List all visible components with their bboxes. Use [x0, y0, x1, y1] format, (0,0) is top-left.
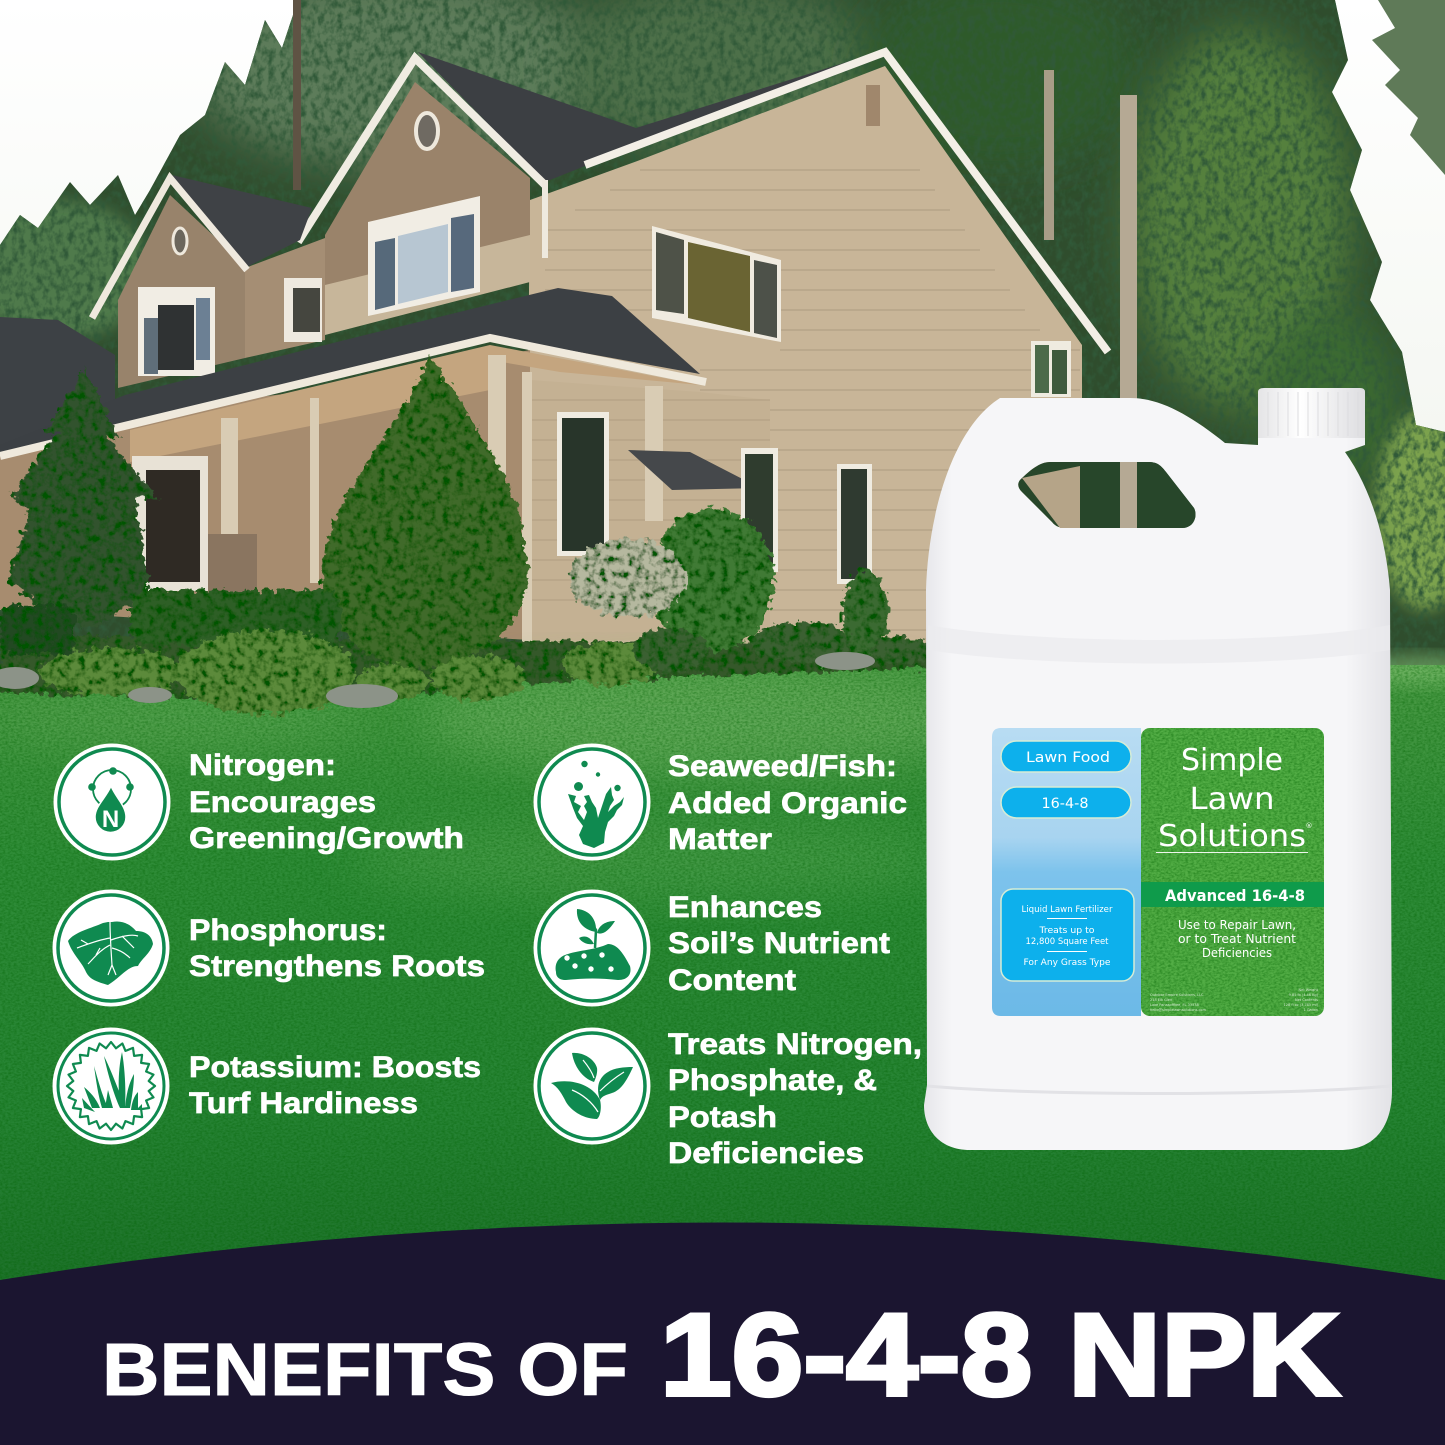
middle wall [245, 238, 325, 358]
dark low shrubs [632, 622, 930, 672]
left hedge [0, 605, 75, 655]
benefit: nitrogen [54, 744, 464, 860]
pill: lawn food [1001, 741, 1131, 772]
window: small mid [284, 278, 322, 342]
left gable fascia [92, 178, 247, 318]
brand name: ® [1306, 822, 1312, 830]
icon: soil with sprout [534, 890, 650, 1006]
pill: lawn food: Lawn Food [1026, 750, 1110, 766]
benefit: phosphorus [52, 890, 485, 1006]
feature box [1001, 889, 1134, 981]
text: deficiencies [668, 1028, 922, 1170]
text: nitrogen: Nitrogen: [189, 749, 336, 782]
text: nitrogen: Encourages [189, 786, 376, 819]
label green panel [1141, 728, 1324, 1016]
pill: 16-4-8 [1001, 787, 1131, 818]
label fine print [1150, 988, 1319, 1012]
flowering shrub [570, 538, 686, 618]
sky [0, 0, 1445, 700]
text: deficiencies: Phosphate, & [668, 1064, 877, 1097]
left round window [173, 228, 187, 254]
handle wall patch [1022, 466, 1080, 528]
porch columns [221, 355, 663, 642]
house [0, 50, 1108, 660]
label blue panel [992, 728, 1141, 1016]
garden bed [0, 635, 930, 704]
window: second gable [368, 196, 480, 316]
text: phosphorus: Strengthens Roots [189, 950, 485, 983]
tree trunks [293, 0, 1137, 530]
left gable wall [118, 195, 245, 388]
window: main upper [652, 226, 781, 342]
porch ceiling [130, 345, 700, 462]
siding lines [530, 170, 1080, 630]
banner heading: benefits of: BENEFITS OF [102, 1328, 628, 1411]
far right conifer [1372, 0, 1445, 175]
text: seaweed [668, 750, 907, 856]
second gable fascia [298, 58, 545, 242]
background trees [0, 0, 1445, 700]
banner heading: 16-4-8 NPK: 16-4-8 NPK [660, 1289, 1340, 1420]
brand name: Simple [1181, 743, 1283, 778]
base bumper shading [927, 1086, 1390, 1094]
label fine print: Outdoor Empire Solutions, LLC [1150, 993, 1204, 997]
icon: nitrogen drop: N [102, 806, 119, 833]
brand name: Solutions [1158, 819, 1306, 854]
text: seaweed: Added Organic [668, 787, 907, 820]
label fine print: 1 Gallon [1303, 1008, 1318, 1012]
text: potassium: Turf Hardiness [189, 1087, 418, 1120]
product jug [924, 388, 1392, 1150]
left lower roof [0, 317, 115, 445]
main gable fascia [585, 52, 1108, 352]
label fine print: hello@simplelawnsolutions.com [1150, 1008, 1207, 1012]
lower left wall [0, 350, 530, 640]
label fine print: 9.85 lb (4.46 Kg) [1289, 993, 1319, 997]
text: phosphorus: Phosphorus: [189, 914, 387, 947]
text: nitrogen: Greening/Growth [189, 822, 464, 855]
band text: Advanced 16-4-8 [1165, 886, 1305, 905]
stone pillar [200, 534, 257, 592]
feature box: For Any Grass Type [1024, 958, 1110, 968]
window: far low [837, 464, 872, 584]
window: right of awning [741, 448, 778, 572]
second gable shingles [325, 82, 530, 295]
window: far right [1031, 341, 1071, 397]
icon: grass burst [52, 1028, 170, 1144]
usage text: Use to Repair Lawn, [1178, 917, 1296, 932]
text: potassium [189, 1051, 481, 1120]
label fine print: 128 fl oz (3,785 ml) [1284, 1003, 1319, 1007]
label fine print: Lake Panasoffkee, FL 33538 [1150, 1003, 1199, 1007]
vent [866, 85, 880, 126]
handle trunk [1120, 462, 1137, 528]
text: potassium: Potassium: Boosts [189, 1051, 481, 1084]
brand name [1156, 743, 1312, 854]
text: soil: Enhances [668, 891, 822, 924]
text: deficiencies: Potash [668, 1101, 777, 1134]
white gutter [542, 180, 548, 258]
label fine print: Net Contents [1295, 998, 1318, 1002]
feature box: Treats up to [1038, 926, 1094, 936]
text: soil: Soil’s Nutrient [668, 927, 890, 960]
feature box: Liquid Lawn Fertilizer [1022, 905, 1113, 915]
label fine print: 218 Elk Glen [1150, 998, 1172, 1002]
window: porch left [132, 456, 208, 591]
shoulder shading [928, 625, 1390, 664]
text: nitrogen [189, 749, 464, 855]
round window [416, 113, 438, 149]
rocks [0, 652, 875, 708]
icon: soil with roots [52, 890, 170, 1006]
usage text: or to Treat Nutrient [1178, 931, 1296, 946]
benefit: seaweed [534, 744, 907, 860]
lower right wall [530, 380, 770, 640]
text: soil: Content [668, 964, 796, 997]
icon: leaves [534, 1028, 650, 1144]
porch roof [0, 288, 700, 452]
big cone shrub [322, 355, 528, 668]
text: seaweed: Seaweed/Fish: [668, 750, 897, 783]
green band [1141, 882, 1324, 907]
lawn highlight stripes [0, 654, 1445, 900]
benefit: soil [534, 890, 890, 1006]
shrub right of porch [650, 508, 774, 652]
text: seaweed: Matter [668, 823, 772, 856]
benefit: potassium [52, 1028, 481, 1144]
text: deficiencies: Treats Nitrogen, [668, 1028, 922, 1061]
main gable wall [525, 66, 1082, 660]
cap [1258, 388, 1365, 438]
window: porch tall [557, 412, 609, 556]
text: phosphorus [189, 914, 485, 983]
trim band [325, 235, 530, 335]
jug body [924, 398, 1392, 1150]
usage text: Deficiencies [1202, 945, 1272, 960]
text: soil [668, 891, 890, 997]
lawn grain [0, 665, 1445, 1305]
see-through handle [1018, 462, 1196, 528]
usage text [1178, 917, 1296, 960]
pill: 16-4-8: 16-4-8 [1042, 796, 1088, 812]
benefit: deficiencies [534, 1028, 922, 1170]
pine left [8, 368, 158, 625]
porch fascia [0, 338, 706, 456]
window: upper left [138, 287, 215, 376]
text: deficiencies: Deficiencies [668, 1137, 864, 1170]
lawn [0, 665, 1445, 1305]
upper roof [418, 50, 885, 182]
product label [992, 728, 1324, 1016]
icon: seaweed [534, 744, 650, 860]
brand name: Lawn [1190, 782, 1274, 817]
hedge [130, 590, 340, 644]
small cone shrub [842, 570, 888, 658]
icon: nitrogen drop [54, 744, 170, 860]
shrubs and landscaping [0, 355, 930, 714]
low shrubs [38, 630, 658, 714]
feature box: 12,800 Square Feet [1026, 937, 1109, 947]
small awning [628, 450, 760, 490]
label fine print: Net Weight [1299, 988, 1319, 992]
bottom banner [0, 1222, 1445, 1445]
left gable roof [172, 175, 312, 268]
